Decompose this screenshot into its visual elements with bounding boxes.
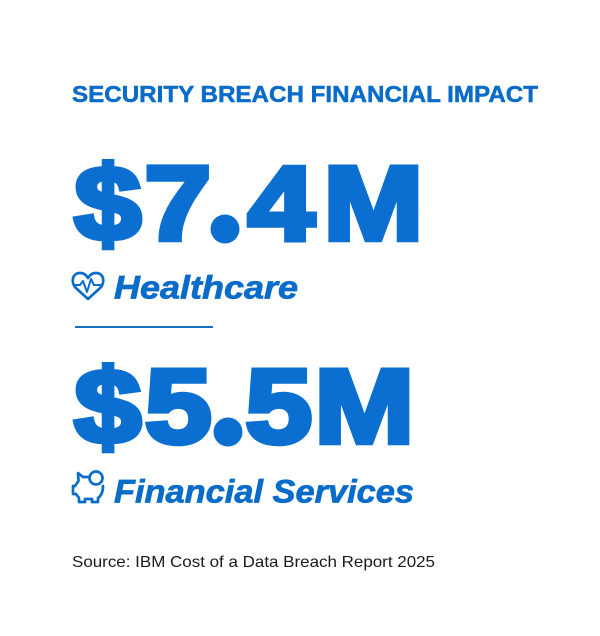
divider line xyxy=(75,326,213,328)
icon: heart with pulse xyxy=(73,273,103,299)
label: Healthcare: Healthcare xyxy=(114,270,298,306)
source note: Source: IBM Cost of a Data Breach Report 2025 xyxy=(72,554,435,571)
label: Financial Services: Financial Services xyxy=(114,474,414,510)
statistic: financial services cost: $5.5M xyxy=(75,347,414,465)
title: SECURITY BREACH FINANCIAL IMPACT xyxy=(72,81,538,107)
statistic: healthcare cost: $7.4M xyxy=(75,144,423,262)
icon: piggy bank xyxy=(73,472,103,502)
